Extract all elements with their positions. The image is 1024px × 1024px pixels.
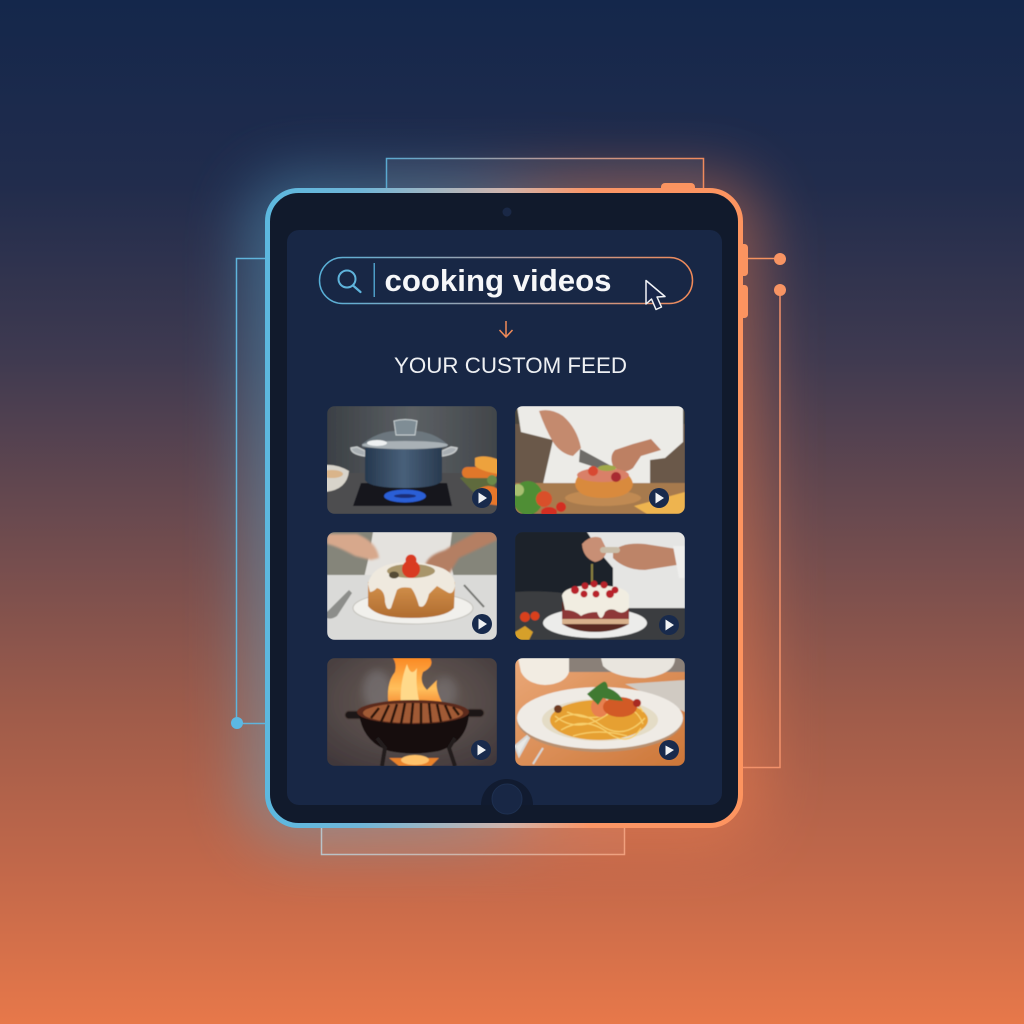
wok rim and grill — [357, 700, 469, 724]
tablet device — [268, 183, 748, 826]
icon: magnifying glass — [338, 270, 360, 292]
chef coat — [517, 406, 683, 484]
flames — [387, 658, 442, 702]
video card: cake with berries, dark background — [515, 532, 685, 640]
cake — [368, 582, 455, 618]
play button — [649, 488, 669, 508]
play button — [659, 615, 679, 635]
sauce and meat — [591, 697, 609, 717]
icon: mouse pointer — [646, 280, 665, 310]
circuit line: right bracket with node — [742, 284, 786, 768]
tart — [574, 475, 634, 498]
camera — [502, 208, 512, 216]
tablet screen — [287, 230, 722, 805]
circuit line: bottom bracket — [322, 826, 624, 855]
circuit line: left bracket with node — [231, 258, 266, 729]
video card: pasta plate — [515, 658, 685, 766]
arrow down — [500, 321, 512, 337]
bowl — [325, 465, 349, 492]
tablet top button — [661, 183, 695, 195]
home button — [481, 779, 533, 814]
burner — [353, 483, 452, 506]
video card: iced cake on white table — [327, 532, 497, 640]
circuit line: right upper node — [744, 253, 786, 265]
basil — [587, 682, 623, 705]
video card: flaming grill wok — [327, 658, 497, 766]
lower fire — [389, 758, 439, 766]
tablet frame — [268, 190, 740, 826]
plate — [517, 688, 683, 752]
side tomatoes and garnish — [520, 612, 530, 622]
legs — [377, 738, 455, 766]
cup — [518, 658, 569, 685]
pot lid — [362, 431, 447, 450]
pot handles — [351, 447, 457, 456]
table — [327, 575, 497, 640]
table — [515, 483, 685, 514]
video card: chef cutting tart — [512, 406, 685, 517]
hands — [582, 537, 607, 562]
pot body — [365, 448, 442, 488]
circuit line: top bracket — [386, 158, 704, 190]
play button — [472, 488, 492, 508]
plate — [543, 608, 647, 638]
arm and hand right — [611, 439, 661, 472]
heading: your custom feed: YOUR CUSTOM FEED — [394, 353, 627, 378]
board — [565, 490, 641, 506]
arm and hand left — [539, 410, 581, 456]
hands — [327, 532, 497, 574]
cake — [562, 602, 629, 632]
knife — [578, 448, 610, 469]
bowl — [601, 658, 675, 678]
tablet glow — [245, 175, 763, 845]
bread — [634, 492, 685, 514]
table — [515, 591, 685, 640]
chef coat — [587, 532, 685, 612]
wok bowl — [359, 714, 469, 754]
play button — [472, 614, 492, 634]
pasta — [550, 700, 648, 740]
vegetables — [515, 480, 542, 514]
fork — [515, 736, 543, 764]
napkin — [625, 680, 685, 712]
tablet side button upper — [738, 244, 748, 276]
garnish stem — [591, 564, 593, 582]
knife and fork — [327, 590, 352, 619]
play button — [659, 740, 679, 760]
smoke — [363, 670, 391, 710]
search bar — [320, 258, 692, 310]
cake toppings — [387, 564, 435, 578]
vegetables — [460, 476, 496, 492]
text cursor divider — [374, 263, 375, 297]
handles — [345, 711, 363, 719]
apron — [364, 532, 454, 576]
berries — [571, 580, 618, 598]
video card: pot on gas burner — [321, 406, 502, 514]
plate — [353, 592, 473, 624]
tablet side button lower — [738, 285, 748, 318]
search query text: cooking videos — [384, 263, 612, 298]
play button — [471, 740, 491, 760]
